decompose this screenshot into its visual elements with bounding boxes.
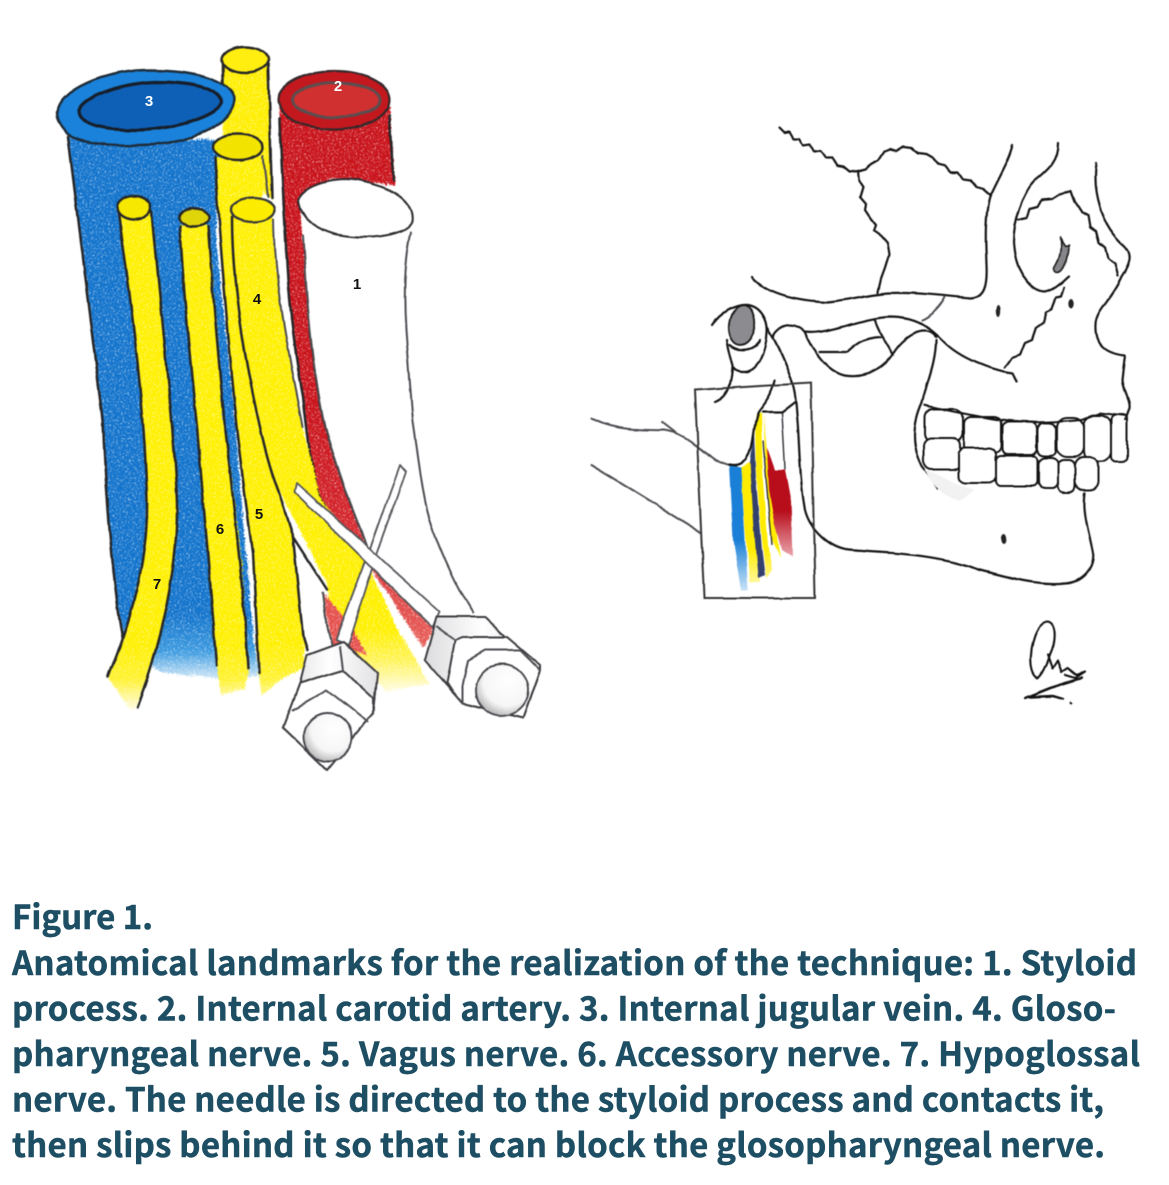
coronoid notch <box>805 331 936 376</box>
number labels: 3 <box>145 93 153 110</box>
lower artery fragment <box>323 593 367 655</box>
number labels: 5 <box>255 506 263 523</box>
glossopharyngeal nerve <box>231 198 430 692</box>
panel: skull and mandible lateral view <box>591 128 1130 704</box>
caption body <box>11 937 1140 1167</box>
temporal and frontal outline <box>752 145 1013 302</box>
number labels: 6 <box>216 521 224 538</box>
caption body: nerve. The needle is directed to the styloid process and contacts it, <box>12 1074 1104 1122</box>
accessory nerve <box>179 208 248 695</box>
number labels <box>145 78 361 593</box>
number labels: 1 <box>353 276 361 293</box>
caption body: then slips behind it so that it can block the glosopharyngeal nerve. <box>12 1119 1105 1167</box>
panel: anatomical illustration of vessels and nerves <box>57 47 540 770</box>
arch details <box>820 320 893 355</box>
fingertip and palpation outline <box>591 418 736 532</box>
mandibular condyle <box>726 303 758 347</box>
mandible outline <box>767 327 1093 584</box>
orbit <box>1013 143 1069 292</box>
internal jugular vein <box>57 70 258 680</box>
maxilla rear edge <box>914 340 938 488</box>
glossopharyngeal rear nerve stem <box>222 47 272 200</box>
zygomatic arch <box>773 317 1017 381</box>
gingival shading <box>925 470 975 500</box>
upper teeth <box>924 405 1127 462</box>
lacrimal opening <box>1054 237 1069 272</box>
internal carotid artery <box>278 71 437 648</box>
caption body: Anatomical landmarks for the realization of the technique: 1. Styloid <box>11 937 1137 985</box>
needle and syringe slipping behind the styloid process <box>295 483 540 718</box>
needle and syringe directed at the styloid process <box>283 465 406 770</box>
caption title: Figure 1. <box>12 891 153 939</box>
number labels: 2 <box>334 78 342 95</box>
caption <box>11 891 1140 1167</box>
number labels: 4 <box>253 291 262 308</box>
signature <box>1025 622 1085 704</box>
condyle outline and ramus <box>712 305 767 402</box>
styloid process <box>298 179 473 620</box>
hypoglossal nerve <box>108 196 177 710</box>
lower teeth <box>924 438 1098 492</box>
inset box with coloured vessels <box>695 380 815 598</box>
vagus nerve <box>213 134 305 695</box>
foramen marks <box>996 299 1074 544</box>
caption body: process. 2. Internal carotid artery. 3. Internal jugular vein. 4. Gloso- <box>12 982 1116 1030</box>
number labels: 7 <box>153 576 161 593</box>
caption body: pharyngeal nerve. 5. Vagus nerve. 6. Accessory nerve. 7. Hypoglossal <box>12 1028 1140 1076</box>
nasal and maxillary profile <box>1095 163 1130 420</box>
sutures of the cranium <box>779 128 1118 367</box>
